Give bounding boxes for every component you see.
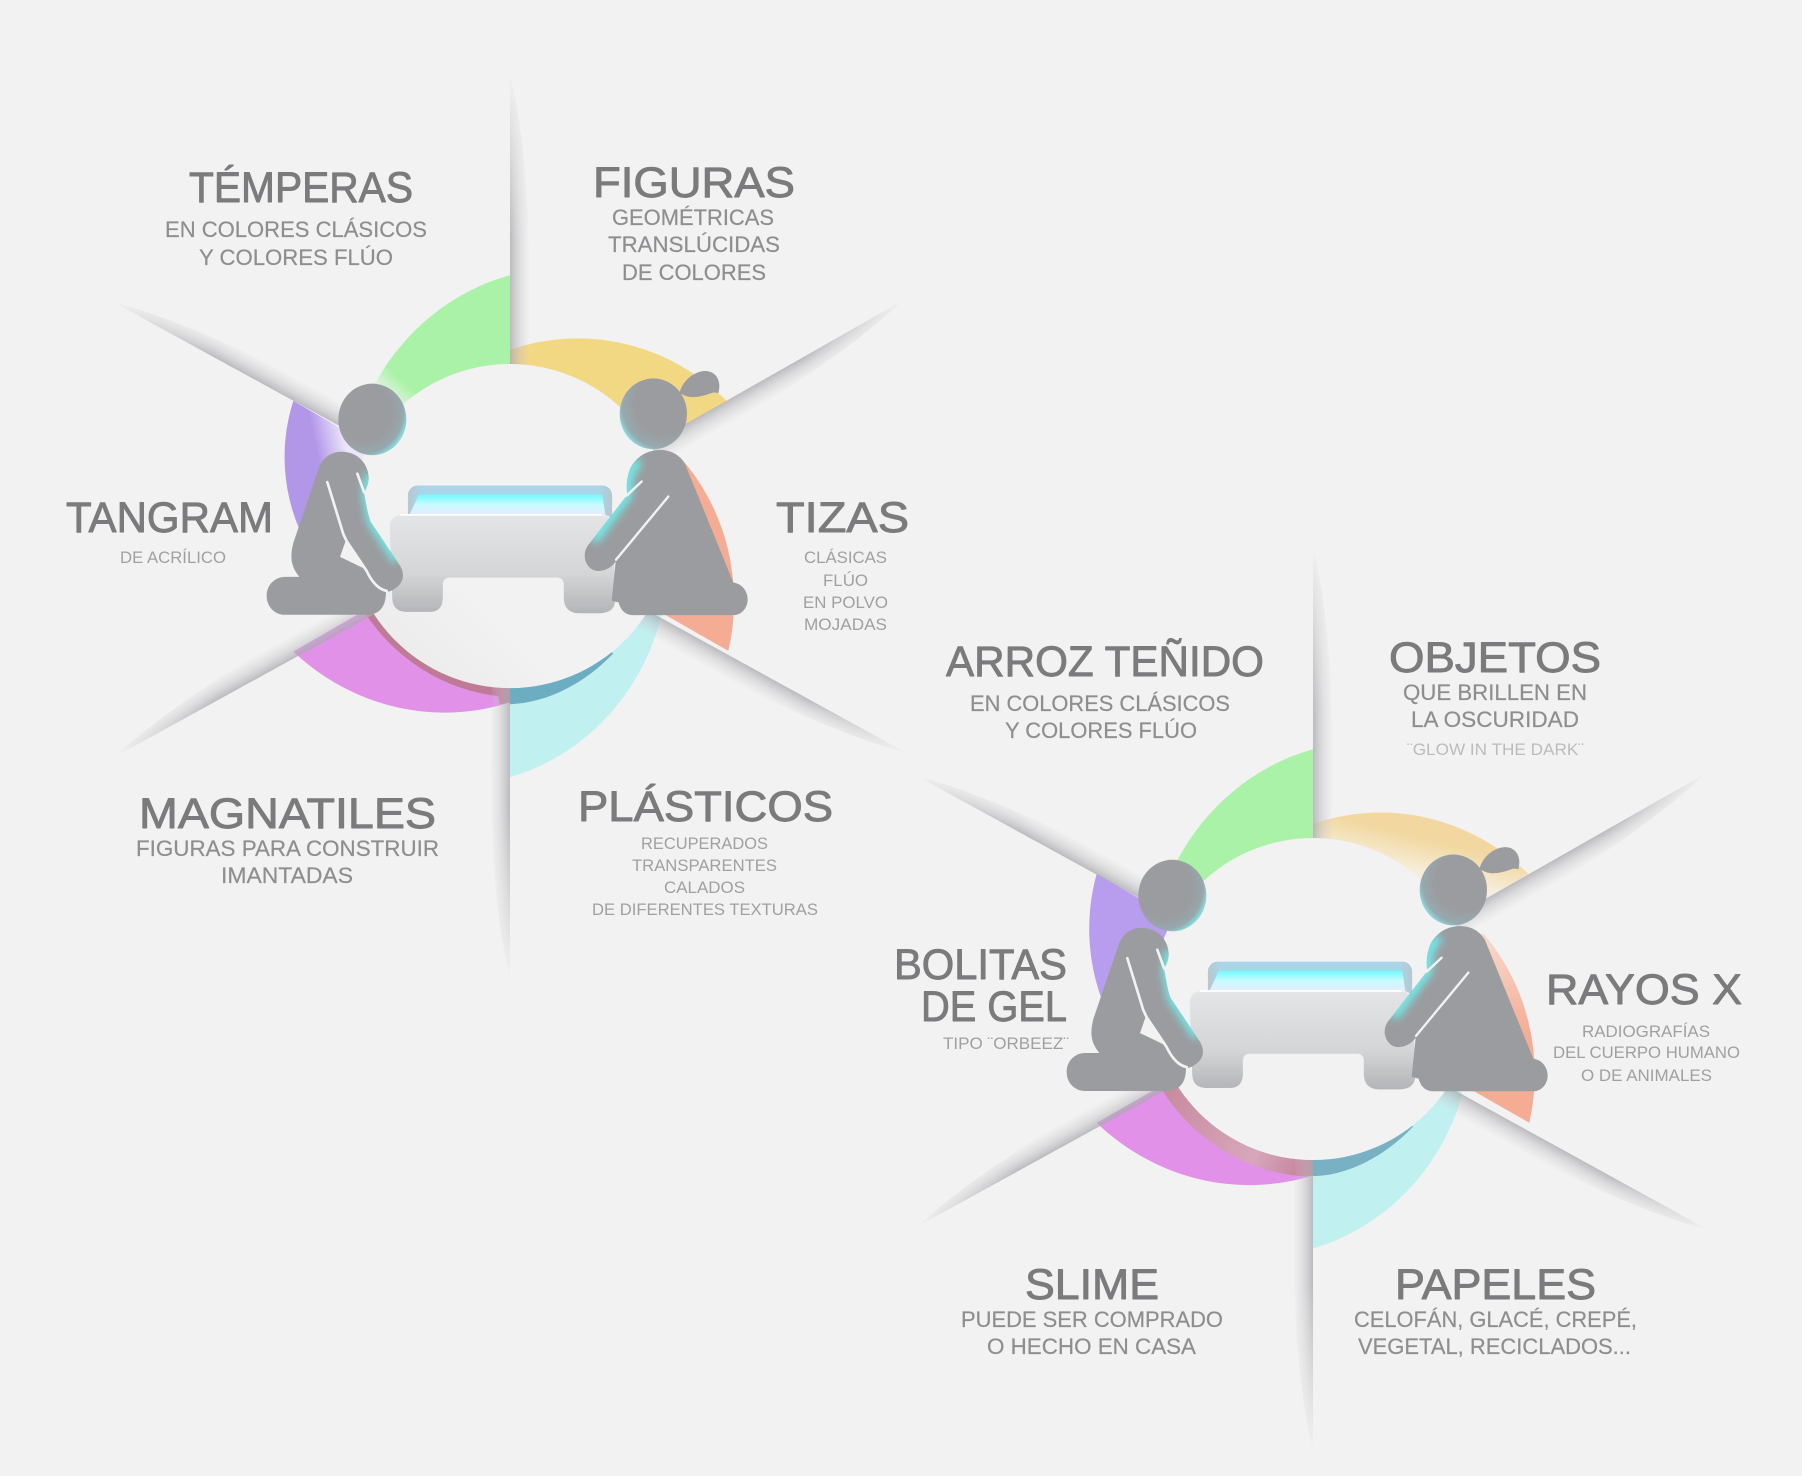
text block: Plásticos: TRANSPARENTES (632, 856, 777, 875)
text block: Tizas: EN POLVO (803, 593, 888, 612)
text block: Tangram: DE ACRÍLICO (120, 548, 226, 567)
segment: magenta inner shadow (1162, 1074, 1313, 1176)
text block: Rayos X: RAYOS X (1546, 966, 1742, 1014)
wheel diagram: upper left (128, 98, 891, 954)
text block: Plásticos: RECUPERADOS (641, 834, 768, 853)
text block: Plásticos (578, 783, 833, 919)
text block: Figuras: GEOMÉTRICAS (612, 205, 774, 230)
text block: Arroz teñido: EN COLORES CLÁSICOS (970, 691, 1230, 716)
wheel diagram: lower right (932, 571, 1693, 1428)
text block: Figuras (593, 159, 795, 285)
figure: girl (585, 371, 748, 615)
text block: Rayos X: DEL CUERPO HUMANO (1553, 1043, 1740, 1062)
text block: Tangram: TANGRAM (66, 494, 273, 542)
figure: boy (267, 384, 406, 615)
text block: Tizas: MOJADAS (804, 615, 887, 634)
segment: magenta (1097, 999, 1313, 1185)
segment: teal (1313, 999, 1463, 1248)
text block: Plásticos: CALADOS (664, 878, 745, 897)
text block: Témperas: Y COLORES FLÚO (199, 245, 393, 270)
segment: salmon (510, 457, 734, 651)
text block: Rayos X (1546, 966, 1742, 1085)
text block: Bolitas de gel (894, 941, 1069, 1053)
segment: teal (510, 526, 662, 777)
text block: Objetos: ¨GLOW IN THE DARK¨ (1407, 740, 1584, 759)
text block: Papeles: VEGETAL, RECICLADOS... (1358, 1334, 1631, 1359)
text block: Slime: SLIME (1025, 1261, 1159, 1309)
text block: Slime: O HECHO EN CASA (987, 1334, 1196, 1359)
segment: yellow (1313, 813, 1528, 999)
text block: Bolitas de gel: TIPO ¨ORBEEZ¨ (943, 1034, 1069, 1053)
text block: Tizas: TIZAS (776, 494, 909, 542)
text block: Tizas: FLÚO (823, 571, 868, 590)
text block: Objetos: QUE BRILLEN EN (1403, 680, 1587, 705)
text block: Objetos (1389, 634, 1601, 759)
text block: Papeles (1354, 1261, 1637, 1359)
text block: Rayos X: O DE ANIMALES (1581, 1066, 1712, 1085)
text block: Figuras: DE COLORES (622, 260, 766, 285)
text block: Rayos X: RADIOGRAFÍAS (1582, 1022, 1710, 1041)
text block: Témperas (165, 164, 427, 270)
text block: Figuras: FIGURAS (593, 159, 795, 207)
text block: Magnatiles (136, 790, 439, 888)
text block: Papeles: CELOFÁN, GLACÉ, CREPÉ, (1354, 1307, 1637, 1332)
text block: Bolitas de gel: DE GEL (921, 983, 1067, 1031)
text block: Témperas: TÉMPERAS (189, 164, 413, 212)
segment: green (373, 275, 510, 526)
text block: Magnatiles: IMANTADAS (221, 863, 353, 888)
text block: Slime: PUEDE SER COMPRADO (961, 1307, 1223, 1332)
text block: Magnatiles: MAGNATILES (139, 790, 436, 838)
segment: green (1177, 749, 1313, 999)
light table (389, 485, 616, 614)
segment: purple (285, 401, 510, 531)
text block: Plásticos: DE DIFERENTES TEXTURAS (592, 900, 818, 919)
segment: yellow (510, 338, 727, 526)
text block: Plásticos: PLÁSTICOS (578, 783, 833, 831)
text block: Arroz teñido: ARROZ TEÑIDO (946, 638, 1264, 686)
central disc (348, 364, 672, 688)
text block: Tangram (66, 494, 273, 567)
text block: Figuras: TRANSLÚCIDAS (608, 232, 780, 257)
text block: Tizas: CLÁSICAS (804, 548, 887, 567)
text block: Arroz teñido (946, 638, 1264, 743)
text block: Objetos: OBJETOS (1389, 634, 1601, 682)
segment: magenta inner shadow (365, 601, 510, 704)
text block: Bolitas de gel: BOLITAS (894, 941, 1067, 989)
figure: girl (1385, 847, 1548, 1091)
text block: Slime (961, 1261, 1223, 1359)
text block: Objetos: LA OSCURIDAD (1411, 707, 1579, 732)
text block: Papeles: PAPELES (1395, 1261, 1596, 1309)
segment: teal inner shadow (510, 601, 613, 704)
light table (1189, 961, 1416, 1090)
segment: teal inner shadow (1313, 1074, 1413, 1176)
segment: salmon (1313, 933, 1535, 1123)
figure: boy (1067, 860, 1206, 1091)
segment: magenta (293, 526, 510, 713)
segment: purple (1089, 874, 1313, 1004)
text block: Magnatiles: FIGURAS PARA CONSTRUIR (136, 836, 439, 861)
text block: Témperas: EN COLORES CLÁSICOS (165, 217, 427, 242)
central disc (1152, 838, 1474, 1160)
divider shadows (128, 98, 891, 954)
text block: Tizas (776, 494, 909, 634)
divider shadows (932, 571, 1693, 1428)
text block: Arroz teñido: Y COLORES FLÚO (1005, 718, 1197, 743)
